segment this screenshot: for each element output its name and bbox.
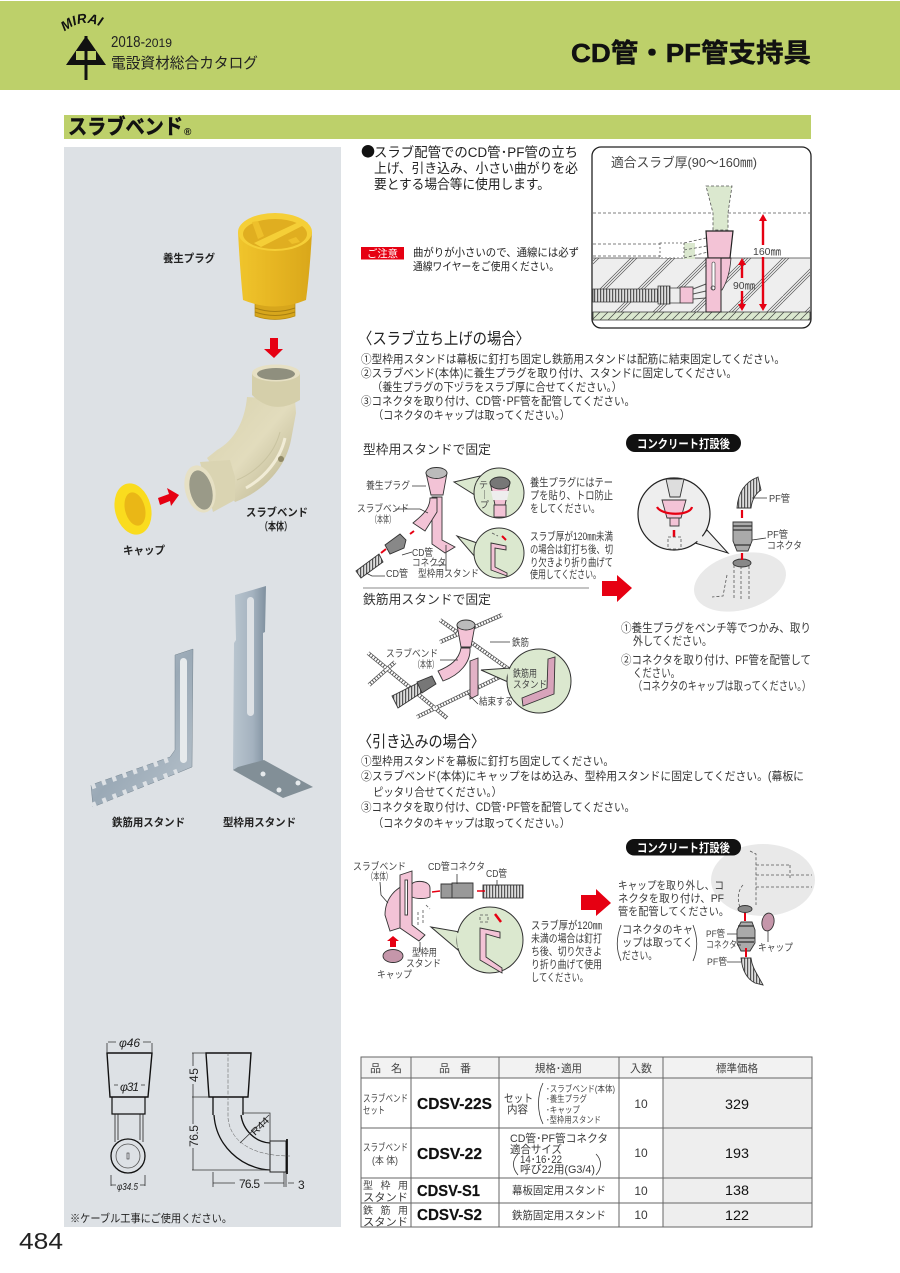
arrow: 160mm — [753, 214, 781, 311]
row: CDSV-22S: 10 — [634, 1097, 648, 1111]
section heading bar: スラブベンド — [68, 115, 183, 139]
rebars — [368, 615, 510, 718]
labels: PF管 — [767, 528, 788, 541]
row: CDSV-S1: スタンド — [363, 1191, 408, 1204]
table grid — [361, 1057, 812, 1227]
instructions: slab rising: ①型枠用スタンドは幕板に釘打ち固定し鉄筋用スタンドは配筋に結束固定してください。 — [361, 352, 785, 366]
labels: stands: 鉄筋用スタンド — [112, 815, 185, 829]
leaders — [752, 498, 767, 540]
intro text — [361, 142, 578, 192]
label: slab bend body — [246, 505, 308, 533]
pill: after concrete placement: コンクリート打設後 — [637, 436, 730, 451]
text: after concrete pull-in: コネクタのキャ — [622, 923, 693, 936]
row: CDSV-22S: CDSV-22S — [417, 1096, 492, 1113]
caution callout: 通線ワイヤーをご使用ください。 — [413, 259, 559, 273]
row: CDSV-S1: 幕板固定用スタンド — [512, 1183, 606, 1197]
arrow: plug into bend — [264, 338, 283, 358]
steps after concrete: （コネクタのキャップは取ってください。） — [633, 679, 811, 693]
detail: tape on plug — [454, 468, 524, 518]
slab cross-section — [593, 213, 810, 320]
labels: stands — [112, 815, 296, 829]
intro text: 上げ、引き込み、小さい曲がりを必 — [374, 161, 578, 176]
bend — [413, 498, 437, 531]
row: CDSV-S1 — [363, 1179, 749, 1204]
note: slab under 120mm (pull-in): スラブ厚が120㎜ — [531, 918, 602, 932]
note: plug tape — [530, 475, 613, 515]
intro text: 要とする場合等に使用します。 — [374, 176, 550, 192]
red arrows — [741, 510, 743, 560]
plug — [457, 625, 475, 647]
arrow: 90mm: 90㎜ — [733, 280, 755, 292]
detail: rebar stand: スタンド — [513, 679, 547, 691]
row: CDSV-22S — [363, 1083, 749, 1125]
labels — [357, 479, 479, 580]
labels: スラブベンド — [353, 860, 406, 873]
subheading: formwork stand: 型枠用スタンドで固定 — [363, 442, 491, 457]
intro text: スラブ配管でのCD管･PF管の立ち — [374, 144, 578, 160]
row: CDSV-S2: 10 — [634, 1208, 648, 1222]
detail: rebar stand — [481, 649, 571, 713]
up arrow — [387, 936, 399, 947]
labels: CD管コネクタ — [428, 860, 485, 873]
text: after concrete pull-in: ップは取ってく — [622, 936, 693, 949]
header row: 規格･適用 — [535, 1061, 582, 1075]
row: CDSV-22S: ･キャップ — [546, 1105, 580, 1115]
labels: 結束する — [479, 695, 513, 708]
row: CDSV-22S: スラブベンド — [363, 1092, 408, 1105]
photo: yellow curing plug — [238, 213, 312, 320]
label: cap: キャップ — [123, 544, 165, 557]
note: slab under 120mm: スラブ厚が120㎜未満 — [530, 529, 613, 543]
note: slab under 120mm: 使用してください。 — [530, 568, 601, 581]
panel: product photos — [64, 147, 341, 1227]
logo: MIRAI: MIRAI — [61, 14, 104, 32]
dimension drawing: front view: φ31 — [120, 1080, 139, 1094]
note: slab under 120mm — [530, 529, 613, 581]
labels: （本体） — [371, 513, 395, 526]
instructions: slab rising: （養生プラグの下ヅラをスラブ厚に合せてください。） — [372, 380, 622, 394]
steps after concrete: ②コネクタを取り付け、PF管を配管して — [621, 652, 811, 667]
plug — [426, 473, 447, 495]
logo: MIRAI — [61, 14, 106, 80]
note: slab under 120mm: の場合は釘打ち後、切 — [530, 542, 613, 556]
text: after concrete pull-in: ださい。 — [622, 949, 657, 962]
connector threads — [737, 926, 755, 942]
header row: 入数 — [630, 1062, 652, 1075]
CD pipe — [483, 885, 523, 898]
labels: コネクタ — [412, 557, 446, 569]
instructions: slab rising: ②スラブベンド(本体)に養生プラグを取り付け、スタンドに固定してください。 — [361, 366, 737, 380]
ghost plug and conduit — [660, 186, 732, 259]
catalogue year and name: 2019 — [145, 36, 172, 50]
labels: CD管 — [486, 867, 507, 880]
label: curing plug: 養生プラグ — [163, 251, 215, 265]
labels: stands: 型枠用スタンド — [223, 815, 296, 829]
note: cable work: ※ケーブル工事にご使用ください。 — [70, 1211, 232, 1225]
dimension drawing: front view — [107, 1036, 152, 1193]
detail: tape on plug: ｜ — [480, 490, 489, 500]
detail: tape on plug: プ — [480, 500, 489, 510]
connector — [733, 522, 752, 551]
illustration: after concrete, plug removal — [638, 477, 802, 621]
red arrows — [745, 913, 746, 957]
dimension drawing: side view: 45 — [187, 1068, 201, 1082]
screws — [418, 905, 430, 926]
row: CDSV-22: CD管･PF管コネクタ — [510, 1131, 608, 1145]
plug top — [426, 468, 447, 478]
pill: after concrete placement — [626, 434, 741, 452]
row: CDSV-S2: 鉄 筋 用 — [363, 1204, 408, 1217]
fixing leaders — [366, 486, 446, 576]
connector — [385, 534, 406, 554]
subheading: rebar stand: 鉄筋用スタンドで固定 — [363, 592, 491, 607]
detail: tape on plug: テ — [479, 480, 488, 490]
labels: スラブベンド — [386, 647, 438, 660]
row: CDSV-22: 適合サイズ — [510, 1142, 562, 1156]
row: CDSV-S1: CDSV-S1 — [417, 1183, 480, 1200]
row: CDSV-22S: セット — [504, 1092, 533, 1105]
labels: （本体） — [414, 658, 438, 671]
red fit arrows — [381, 531, 414, 553]
row: CDSV-22S: ･スラブベンド(本体) — [546, 1083, 615, 1094]
header row: 標準価格 — [716, 1061, 758, 1075]
panel: slab thickness diagram — [592, 147, 811, 328]
arrow: cap into bend — [158, 488, 179, 506]
pink bend assembly — [593, 231, 733, 312]
bend — [385, 881, 430, 931]
labels — [706, 928, 793, 968]
pipe — [392, 682, 424, 708]
labels — [767, 492, 802, 552]
dimension drawing: side view — [187, 1052, 305, 1192]
dimension drawing: side view: 3 — [298, 1178, 305, 1192]
text: after concrete pull-in: キャップを取り外し、コ — [618, 879, 724, 892]
note: slab under 120mm (pull-in): してください。 — [531, 971, 588, 984]
note: slab under 120mm (pull-in) — [531, 918, 602, 984]
cap — [761, 912, 775, 932]
text: after concrete pull-in: ネクタを取り付け、PF — [618, 892, 724, 905]
dashed conduit — [712, 565, 749, 600]
row: CDSV-22S: 329 — [725, 1097, 749, 1112]
labels: コネクタ — [706, 940, 737, 951]
caution callout: 曲がりが小さいので、通線には必ず — [413, 245, 579, 259]
header row: 品 番 — [439, 1062, 471, 1075]
row: CDSV-22S: ･養生プラグ — [546, 1093, 587, 1104]
plug top — [457, 620, 475, 630]
rebar texture — [368, 615, 510, 718]
diagram title: 適合スラブ厚(90〜160㎜) — [611, 155, 757, 170]
leaders — [380, 874, 497, 952]
row: CDSV-S1: 138 — [725, 1183, 749, 1198]
caution callout: ご注意 — [367, 247, 398, 260]
row: CDSV-S2: スタンド — [363, 1216, 408, 1228]
photo: yellow cap — [109, 479, 157, 539]
labels: 鉄筋 — [512, 636, 529, 649]
row: CDSV-22: 10 — [634, 1146, 648, 1160]
note: slab under 120mm: り欠きより折り曲げて — [530, 555, 613, 569]
connector — [737, 922, 755, 951]
row: CDSV-S2: 122 — [725, 1208, 749, 1223]
row: CDSV-22S: ･型枠用スタンド — [546, 1114, 601, 1125]
dimension drawing: side view: R44 — [249, 1115, 272, 1138]
row: CDSV-S2: CDSV-S2 — [417, 1207, 482, 1224]
arrow: 160mm: 160㎜ — [753, 246, 781, 258]
table header fill — [361, 1057, 812, 1078]
bend — [438, 648, 470, 681]
text: after concrete pull-in — [617, 879, 729, 962]
labels: 型枠用 — [412, 946, 437, 959]
arrow: to after concrete — [602, 575, 632, 602]
illustration: pull-in fixing — [353, 860, 523, 981]
stand — [470, 658, 478, 699]
labels: CD管 — [412, 546, 433, 559]
dimension drawing: side view: 76.5 — [187, 1125, 201, 1147]
page number: 484 — [19, 1228, 63, 1254]
header band — [0, 1, 900, 90]
hole — [733, 559, 751, 567]
slab ellipse — [711, 844, 815, 916]
stand — [432, 497, 455, 553]
photo: slab bend body — [180, 364, 300, 516]
detail: bent stand — [457, 528, 524, 578]
row: CDSV-22: 193 — [725, 1146, 749, 1161]
instructions: pull-in: ②スラブベンド(本体)にキャップをはめ込み、型枠用スタンドに固定してください。(幕板に — [361, 769, 804, 783]
note: plug tape: プを貼り、トロ防止 — [530, 488, 613, 502]
note: slab under 120mm (pull-in): ち後、切り欠きよ — [531, 944, 602, 958]
arrow: 90mm — [733, 258, 755, 311]
connector — [441, 883, 473, 898]
slab ellipse — [687, 543, 793, 621]
arrow: to after concrete (pull-in) — [581, 889, 611, 916]
dimension drawing: front view: φ46 — [119, 1036, 140, 1050]
section heading bar — [64, 115, 811, 139]
photo: rebar stand — [91, 649, 193, 807]
PF pipe — [741, 958, 763, 985]
row: CDSV-22 — [363, 1131, 749, 1176]
label: slab bend body: スラブベンド — [246, 505, 308, 519]
zoom circle — [638, 478, 728, 553]
steps after concrete: ①養生プラグをペンチ等でつかみ、取り — [621, 620, 811, 635]
dimension drawing: front view: φ34.5 — [117, 1182, 138, 1193]
stand — [400, 871, 425, 941]
heading: slab rising case: 〈スラブ立ち上げの場合〉 — [358, 329, 530, 348]
labels: 養生プラグ — [366, 479, 410, 492]
labels: PF管 — [707, 956, 727, 968]
detail: bent stand (pull-in) — [431, 907, 523, 973]
caution callout — [361, 245, 579, 273]
catalogue year and name — [111, 34, 258, 72]
note: plug tape: 養生プラグにはテー — [530, 475, 613, 489]
hole — [738, 906, 752, 912]
price column fill — [663, 1078, 812, 1227]
illustration: formwork stand fixing — [356, 468, 479, 580]
labels — [386, 636, 529, 708]
stand slot — [405, 880, 408, 915]
note: slab under 120mm (pull-in): 未満の場合は釘打 — [531, 931, 602, 945]
PF pipe — [737, 477, 761, 508]
steps after concrete — [621, 620, 811, 693]
row: CDSV-S1: 10 — [634, 1184, 648, 1198]
steps after concrete: 外してください。 — [633, 634, 712, 648]
illustration: after concrete, pull-in — [626, 839, 815, 985]
instructions: pull-in: ①型枠用スタンドを幕板に釘打ち固定してください。 — [361, 754, 614, 768]
note: plug tape: をしてください。 — [530, 502, 600, 515]
instructions: pull-in: ③コネクタを取り付け、CD管･PF管を配管してください。 — [361, 800, 635, 814]
row: CDSV-S1: 型 枠 用 — [363, 1179, 408, 1192]
page title: CD管・PF管支持具 — [571, 38, 811, 68]
text: after concrete pull-in: 管を配管してください。 — [618, 904, 729, 918]
leaders — [440, 642, 510, 704]
row: CDSV-22S: 内容 — [507, 1102, 528, 1116]
photo: formwork stand — [233, 586, 313, 798]
instructions: slab rising: ③コネクタを取り付け、CD管･PF管を配管してください。 — [361, 394, 635, 408]
catalogue year and name: 電設資材総合カタログ — [111, 55, 258, 72]
red arrows — [432, 891, 485, 892]
detail: rebar stand: 鉄筋用 — [513, 667, 537, 680]
instructions: pull-in — [361, 754, 804, 830]
CD pipe — [356, 554, 383, 578]
note: slab under 120mm (pull-in): り折り曲げて使用 — [531, 957, 602, 971]
ghost stand — [738, 851, 812, 907]
pill: after concrete placement: コンクリート打設後 — [637, 840, 730, 855]
header row — [370, 1061, 758, 1075]
row: CDSV-22: (本 体) — [372, 1154, 398, 1167]
labels: CD管 — [386, 567, 408, 580]
labels — [353, 860, 507, 981]
leaders — [727, 931, 768, 962]
labels: キャップ — [758, 942, 793, 954]
row: CDSV-22S: セット — [363, 1105, 385, 1117]
labels: キャップ — [377, 969, 412, 981]
connector threads — [733, 526, 752, 545]
connector — [417, 676, 436, 693]
instructions: slab rising — [361, 352, 785, 422]
instructions: slab rising: （コネクタのキャップは取ってください。） — [373, 409, 570, 422]
instructions: pull-in: （コネクタのキャップは取ってください。） — [373, 817, 570, 830]
labels: PF管 — [769, 492, 790, 505]
heading: pull-in case: 〈引き込みの場合〉 — [358, 733, 485, 751]
intro text: ● — [361, 142, 375, 162]
row: CDSV-22: 呼び22用(G3/4) — [520, 1163, 595, 1176]
catalogue year and name: 2018- — [111, 34, 145, 51]
labels: スラブベンド — [357, 502, 409, 515]
row: CDSV-22: 14･16･22 — [520, 1154, 562, 1166]
row: CDSV-S2: 鉄筋固定用スタンド — [512, 1208, 606, 1222]
illustration: rebar stand fixing — [368, 615, 529, 718]
cap — [383, 950, 403, 962]
row: CDSV-S2 — [363, 1204, 749, 1228]
section heading bar: ® — [184, 127, 192, 138]
instructions: pull-in: ピッタリ合せてください。） — [373, 786, 502, 799]
labels: コネクタ — [767, 540, 802, 552]
label: slab bend body: （本体） — [260, 519, 292, 533]
header row: 品 名 — [370, 1061, 402, 1075]
row: CDSV-22: スラブベンド — [363, 1141, 408, 1154]
row: CDSV-22: CDSV-22 — [417, 1146, 482, 1163]
labels: （本体） — [367, 870, 392, 883]
labels: PF管 — [706, 928, 725, 940]
steps after concrete: ください。 — [633, 666, 680, 680]
product table — [361, 1057, 812, 1228]
dimension drawing: side view: 76.5 — [239, 1177, 260, 1191]
labels: スタンド — [406, 958, 441, 970]
labels: 型枠用スタンド — [418, 567, 479, 580]
